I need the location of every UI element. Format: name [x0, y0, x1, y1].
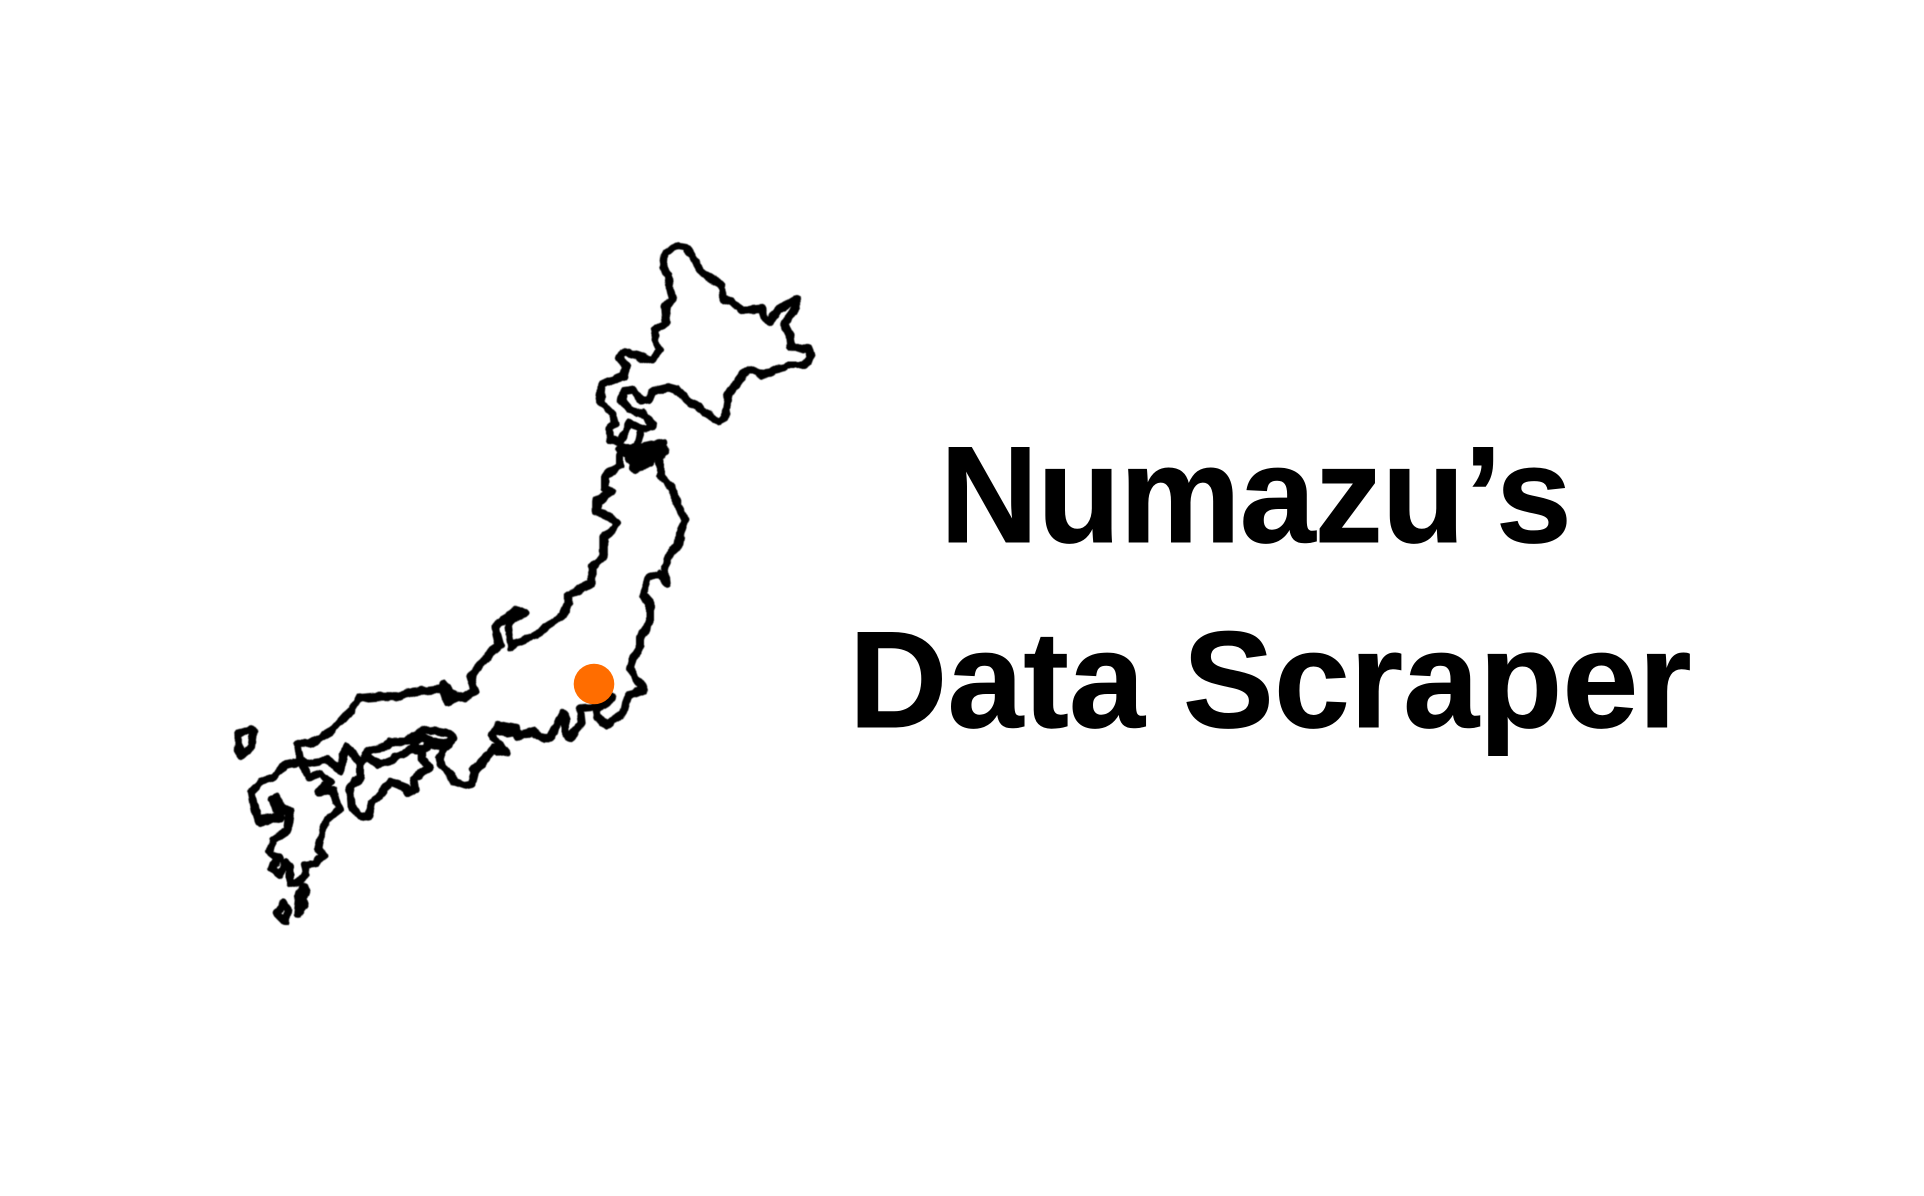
island: Hokkaido and Tsugaru strait	[600, 246, 812, 467]
coastline outlines	[238, 246, 812, 922]
small southern and western islands	[238, 728, 307, 922]
island: Shikoku	[350, 737, 430, 817]
title line 2: Data Scraper	[849, 603, 1692, 756]
title line 1: Numazu’s	[940, 418, 1571, 571]
island: western Honshu	[297, 613, 525, 785]
island: Honshu	[443, 457, 685, 770]
island: Kyushu	[252, 762, 340, 883]
location marker: Numazu	[574, 664, 614, 704]
